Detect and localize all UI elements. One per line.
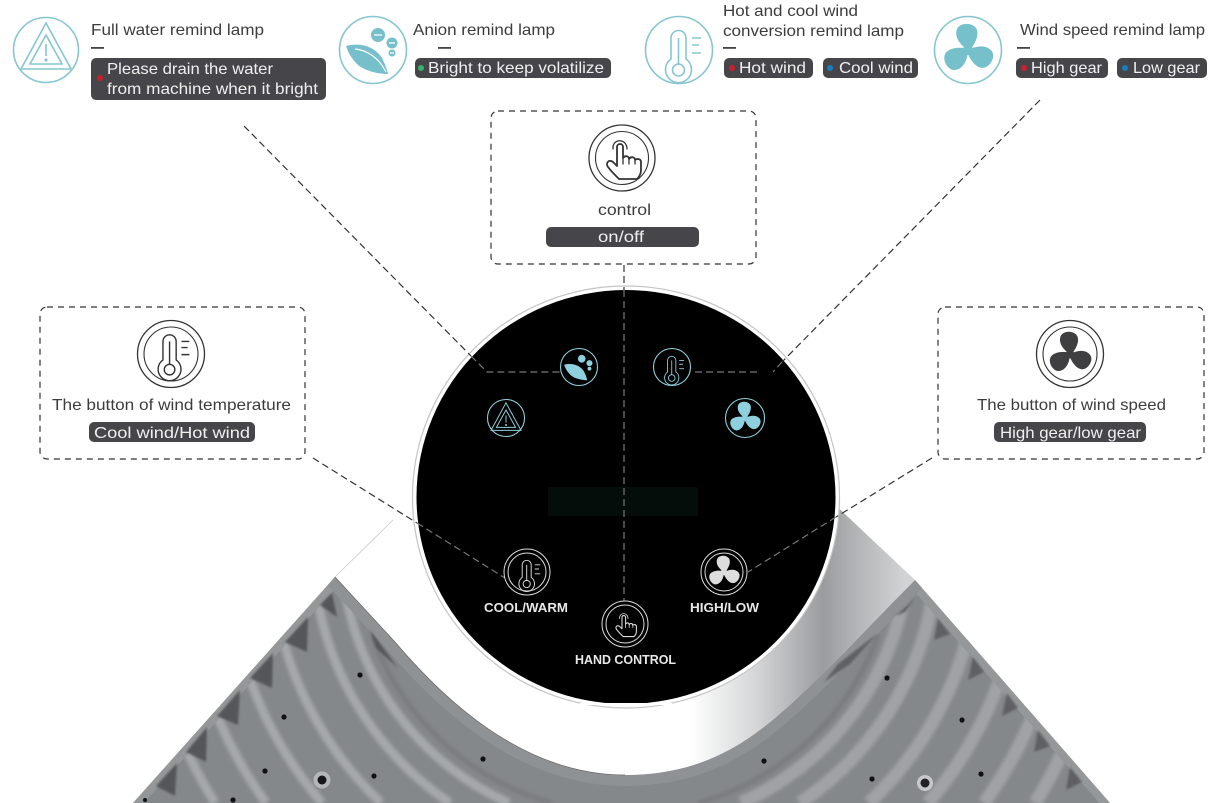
callout: wind speed button xyxy=(938,307,1204,459)
product collar xyxy=(335,500,915,775)
panel buttons xyxy=(484,549,759,667)
lamp legend: wind speed: Low gear xyxy=(1133,60,1201,77)
button: high/low xyxy=(690,549,759,615)
lamp legend: full water: from machine when it bright xyxy=(107,81,319,98)
icon: thermometer xyxy=(646,16,712,84)
round control panel xyxy=(412,286,840,708)
icon: leaf and ions xyxy=(340,16,406,84)
callout: control xyxy=(491,111,756,264)
callout: wind temperature button: The button of wind temperature xyxy=(52,397,291,414)
callout: control: on/off xyxy=(598,229,645,246)
button: hand control xyxy=(575,601,676,667)
lamp legend: anion xyxy=(340,16,611,84)
lamp legend: hot and cool wind: Hot and cool wind xyxy=(723,3,858,20)
icon: fan button xyxy=(1036,320,1104,388)
callout: wind temperature button xyxy=(40,307,305,459)
lamp legend: anion: Bright to keep volatilize xyxy=(428,60,604,77)
lamp legend: full water: Please drain the water xyxy=(107,61,274,78)
lamp legend: hot and cool wind xyxy=(646,3,918,84)
product base: grey ribbed body xyxy=(133,577,1110,803)
lamp legend: full water: Full water remind lamp xyxy=(91,22,264,39)
icon: thermometer button xyxy=(138,320,204,388)
callout: control: control xyxy=(598,202,651,219)
icon: warning triangle xyxy=(14,18,78,82)
icon: hand button xyxy=(589,125,655,191)
lamp legend: hot and cool wind: Hot wind xyxy=(739,60,806,77)
callout: wind speed button: High gear/low gear xyxy=(1000,425,1142,442)
lamp legend: anion: Anion remind lamp xyxy=(413,22,555,39)
callout: wind temperature button: Cool wind/Hot wind xyxy=(94,425,250,442)
icon: panel full water lamp xyxy=(488,400,524,436)
lamp legend: hot and cool wind: conversion remind lamp xyxy=(723,23,904,40)
icon: fan xyxy=(934,16,1002,84)
panel lamp icons xyxy=(488,348,764,438)
leader lines xyxy=(244,100,1040,602)
button: cool/warm: COOL/WARM xyxy=(484,601,568,615)
icon: panel wind speed lamp xyxy=(726,398,764,438)
lamp legend: hot and cool wind: Cool wind xyxy=(839,60,913,77)
button: hand control: HAND CONTROL xyxy=(575,653,676,667)
button: cool/warm xyxy=(484,549,568,615)
lamp legend: wind speed: High gear xyxy=(1031,60,1103,77)
lamp legend: wind speed: Wind speed remind lamp xyxy=(1020,22,1205,39)
icon: panel anion lamp xyxy=(560,348,598,386)
button: high/low: HIGH/LOW xyxy=(690,601,759,615)
callout: wind speed button: The button of wind speed xyxy=(977,397,1166,414)
lamp legend: full water xyxy=(14,18,326,100)
lamp legend: wind speed xyxy=(934,16,1207,84)
icon: panel wind conversion lamp xyxy=(654,348,690,386)
